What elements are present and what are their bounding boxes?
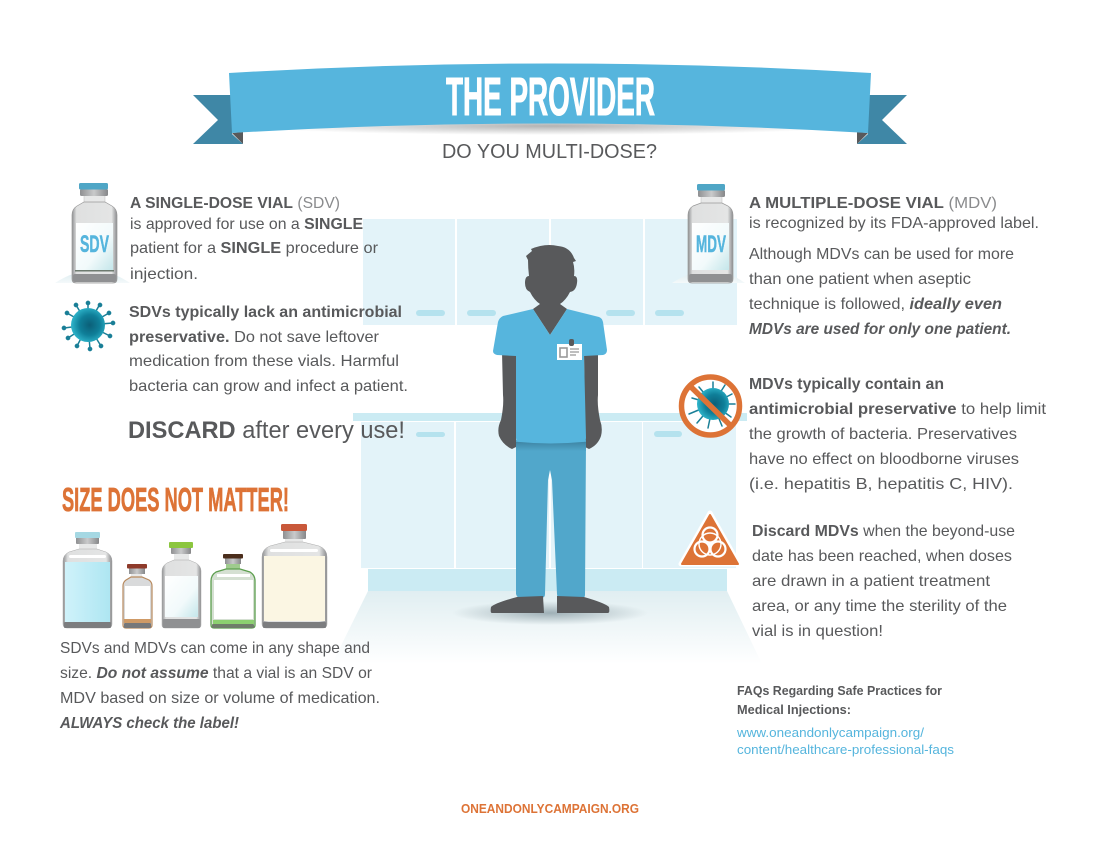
icon: biohazard warning [681,513,739,564]
panel: FAQs: FAQs Regarding Safe Practices for [737,684,942,698]
callout: discard: DISCARD after every use! [128,417,405,444]
banner shadow [250,117,850,135]
vial label MDV: MDV [696,231,726,258]
lower kitchen cabinets and counter [353,413,747,591]
shoes [491,596,609,613]
vial 4 [211,554,255,628]
panel: lack of preservative text: SDVs typically lack an antimicrobial [129,304,402,321]
panel: discard text: Discard MDVs when the beyond-use [752,523,1015,540]
vial 3 [162,542,201,628]
panel: single-dose vial text: is approved for use on a SINGLE [130,216,363,233]
panel: multiple-dose vial text: A MULTIPLE-DOSE VIAL (MDV) [749,195,997,212]
panel: multiple-dose vial text: than one patient when aseptic [749,271,971,288]
panel: multiple-dose vial text: is recognized by its FDA-approved label. [749,215,1039,232]
arms and hands [498,352,602,449]
panel: discard text: date has been reached, when doses [752,548,1012,565]
panel: size text: size. Do not assume that a vial is an SDV or [60,665,373,682]
panel: preservative text: the growth of bacteria. Preservatives [749,426,1017,443]
panel: multiple-dose vial text: MDVs are used for only one patient. [749,321,1011,338]
panel: discard text: area, or any time the sterility of the [752,598,1007,615]
biohazard symbol [694,528,726,556]
heading: size does not matter: SIZE DOES NOT MATTER! [62,481,289,518]
footer: ONEANDONLYCAMPAIGN.ORG [461,802,639,816]
panel: discard text: are drawn in a patient treatment [752,573,991,590]
panel: discard text: vial is in question! [752,623,883,640]
icon: crossed-out virus [682,377,740,435]
panel: preservative text: have no effect on bloodborne viruses [749,451,1019,468]
panel: lack of preservative text: medication from these vials. Harmful [129,353,399,370]
subtitle: DO YOU MULTI-DOSE? [442,141,657,163]
panel: FAQs: content/healthcare-professional-faqs [737,742,955,757]
floor shadow [452,601,648,625]
trousers waist shade [516,442,586,451]
title: THE PROVIDER [446,67,655,127]
panel: preservative text: MDVs typically contain an [749,376,944,393]
icon: virus [62,301,115,351]
banner tails [193,95,907,144]
panel: size text [59,640,380,732]
vials of different sizes [63,524,327,628]
trousers [516,440,586,598]
icon: multiple-dose vial [672,184,745,283]
panel: size text: MDV based on size or volume of medication. [60,690,380,707]
head and neck [525,245,577,335]
panel: lack of preservative text: bacteria can grow and infect a patient. [129,378,408,395]
scrub top [493,309,607,444]
figure: healthcare provider [491,245,609,613]
vial 2 [123,564,152,628]
id badge [557,339,582,360]
panel: discard text [752,523,1015,640]
panel: preservative text: (i.e. hepatitis B, hepatitis C, HIV). [749,476,1013,493]
panel: single-dose vial text [130,195,379,283]
panel: FAQs [736,684,955,757]
vial label SDV: SDV [80,231,109,258]
panel: FAQs: Medical Injections: [737,703,851,717]
banner [193,64,907,144]
icon: single-dose vial [55,183,130,283]
floor [332,591,762,664]
panel: preservative text [749,376,1047,493]
panel: lack of preservative text [129,304,408,395]
panel: single-dose vial text: injection. [130,266,198,283]
panel: multiple-dose vial text: Although MDVs can be used for more [749,246,1014,263]
panel: FAQs: www.oneandonlycampaign.org/ [736,725,924,740]
panel: single-dose vial text: patient for a SINGLE procedure or [130,240,379,257]
upper kitchen cabinets [363,219,737,325]
panel: lack of preservative text: preservative. Do not save leftover [129,329,380,346]
panel: size text: ALWAYS check the label! [59,715,240,732]
panel: multiple-dose vial text [749,195,1039,338]
banner folds [232,132,868,144]
banner body [229,64,871,133]
vial 5 [262,524,327,628]
vial 1 [63,532,112,628]
panel: single-dose vial text: A SINGLE-DOSE VIAL (SDV) [130,195,340,212]
panel: multiple-dose vial text: technique is followed, ideally even [749,296,1002,313]
panel: size text: SDVs and MDVs can come in any shape and [60,640,370,657]
panel: preservative text: antimicrobial preservative to help limit [749,401,1047,418]
